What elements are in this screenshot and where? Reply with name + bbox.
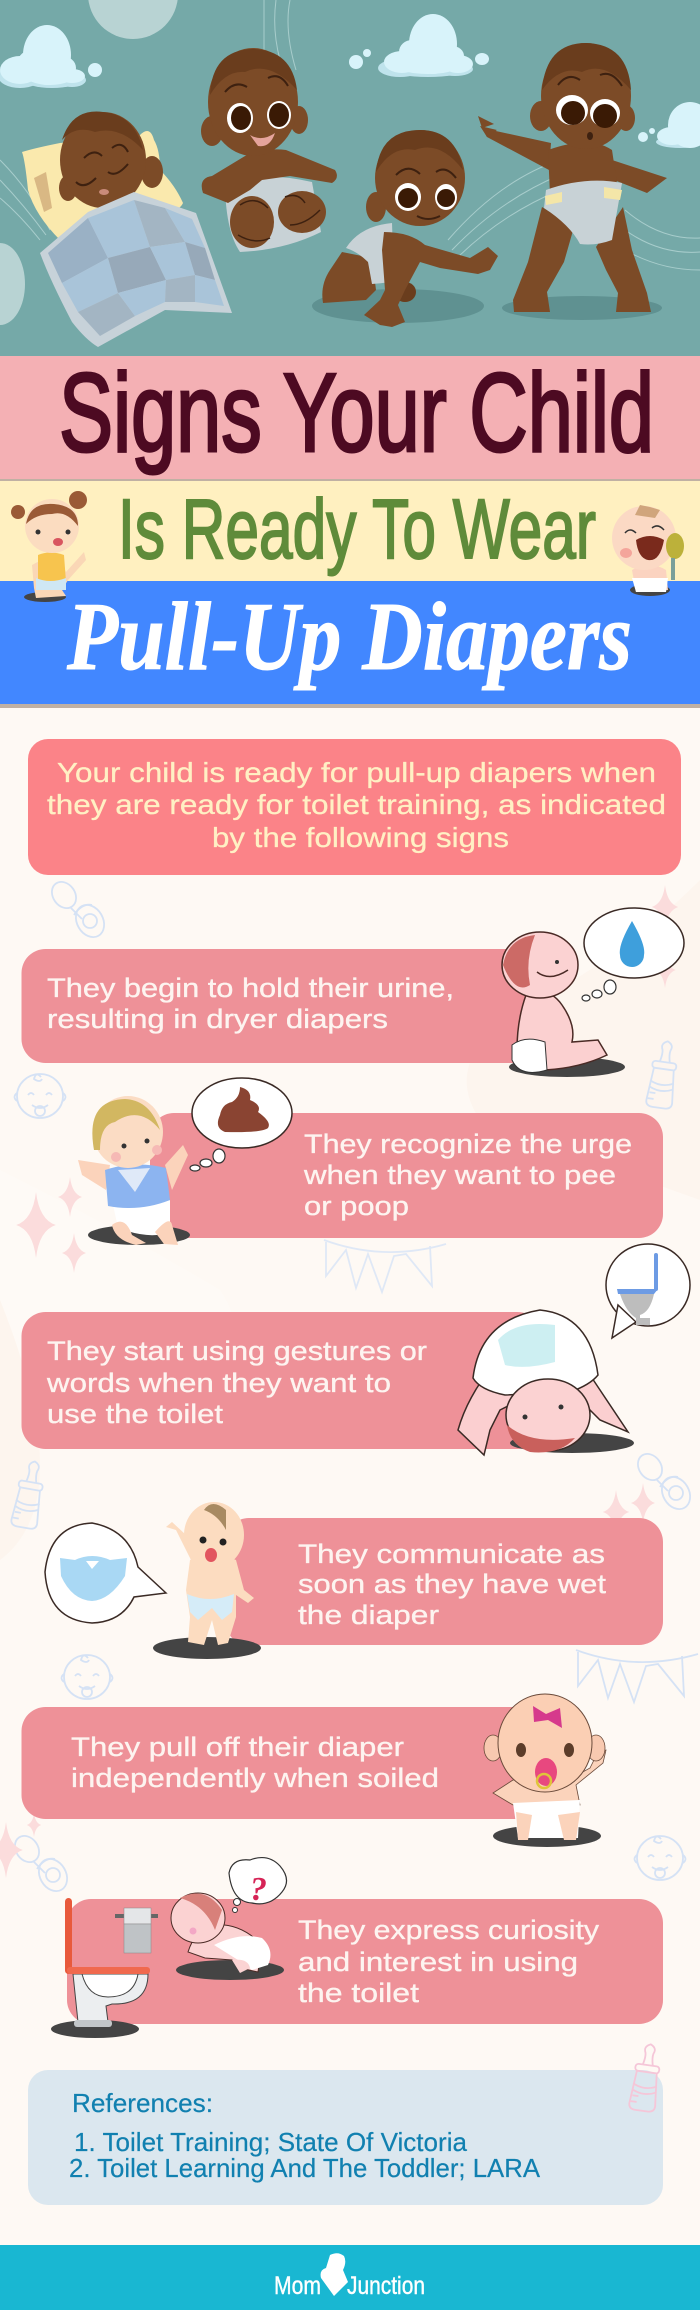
sign 2 panel (150, 1113, 663, 1238)
intro panel: they are ready for toilet training, as indicated (47, 789, 666, 820)
sign 4 panel: soon as they have wet (298, 1569, 607, 1599)
icon: laughing baby right of title (612, 505, 684, 596)
sign 1 panel: They begin to hold their urine, (47, 973, 454, 1003)
baby sleeping under blanket (22, 112, 232, 347)
thin wind lines (0, 0, 700, 270)
pale background circles (0, 0, 178, 325)
sign 5 panel (22, 1707, 542, 1819)
footer with MomJunction logo: Junction (347, 2272, 425, 2300)
sign 3 panel: words when they want to (46, 1368, 391, 1398)
baby standing (478, 43, 667, 320)
sign 3 panel: They start using gestures or (47, 1336, 427, 1366)
sign 6 illustration: toilet, toilet paper and curious baby (51, 1858, 287, 2038)
references panel (28, 2070, 663, 2205)
sign 2 panel: when they want to pee (303, 1160, 616, 1190)
sign 5 panel: independently when soiled (71, 1763, 439, 1793)
sign 4 panel (225, 1518, 663, 1645)
intro panel (28, 739, 681, 875)
decorative line icons and sparkles (0, 877, 698, 1896)
references panel: 1. Toilet Training; State Of Victoria (74, 2127, 468, 2157)
sign 1 panel: resulting in dryer diapers (47, 1004, 388, 1034)
hero illustration: four babies on teal (0, 0, 700, 356)
sign 6 panel (67, 1899, 663, 2024)
icon: toddler girl left of title (11, 491, 87, 602)
sign 6 panel: They express curiosity (298, 1915, 600, 1945)
baby crawling (312, 130, 498, 327)
sign 1 illustration: baby thinking of water drop (502, 908, 684, 1077)
footer with MomJunction logo (0, 2245, 700, 2310)
baby sitting holding feet (201, 48, 337, 252)
sign 4 illustration: standing baby with diaper bubble (45, 1502, 261, 1659)
references panel: 2. Toilet Learning And The Toddler; LARA (69, 2153, 541, 2183)
clouds (0, 14, 700, 148)
intro panel: by the following signs (212, 822, 509, 853)
sign 3 illustration: baby bending over with toilet bubble (458, 1244, 690, 1455)
sign 4 panel: They communicate as (298, 1539, 605, 1569)
sign 3 panel (22, 1312, 542, 1449)
sign 1 panel (22, 949, 542, 1063)
sign 6 illustration: toilet, toilet paper and curious baby: ? (250, 1871, 267, 1908)
sign 2 panel: or poop (304, 1191, 409, 1221)
intro panel: Your child is ready for pull-up diapers when (57, 757, 656, 788)
sign 6 panel: the toilet (298, 1978, 420, 2008)
sign 3 panel: use the toilet (47, 1399, 224, 1429)
blanket (40, 192, 232, 347)
sign 6 panel: and interest in using (298, 1947, 578, 1977)
sign 2 illustration: blond baby thinking of poop (78, 1078, 292, 1245)
sign 5 illustration: baby girl with bow and pacifier (484, 1694, 606, 1847)
logo icon (321, 2253, 348, 2296)
logo text: Mom (274, 2272, 321, 2300)
sign 4 panel: the diaper (298, 1600, 439, 1630)
icon: pink bottle over references panel (629, 2043, 664, 2112)
sign 2 panel: They recognize the urge (304, 1129, 632, 1159)
references panel: References: (72, 2088, 213, 2118)
sign 5 panel: They pull off their diaper (71, 1732, 404, 1762)
